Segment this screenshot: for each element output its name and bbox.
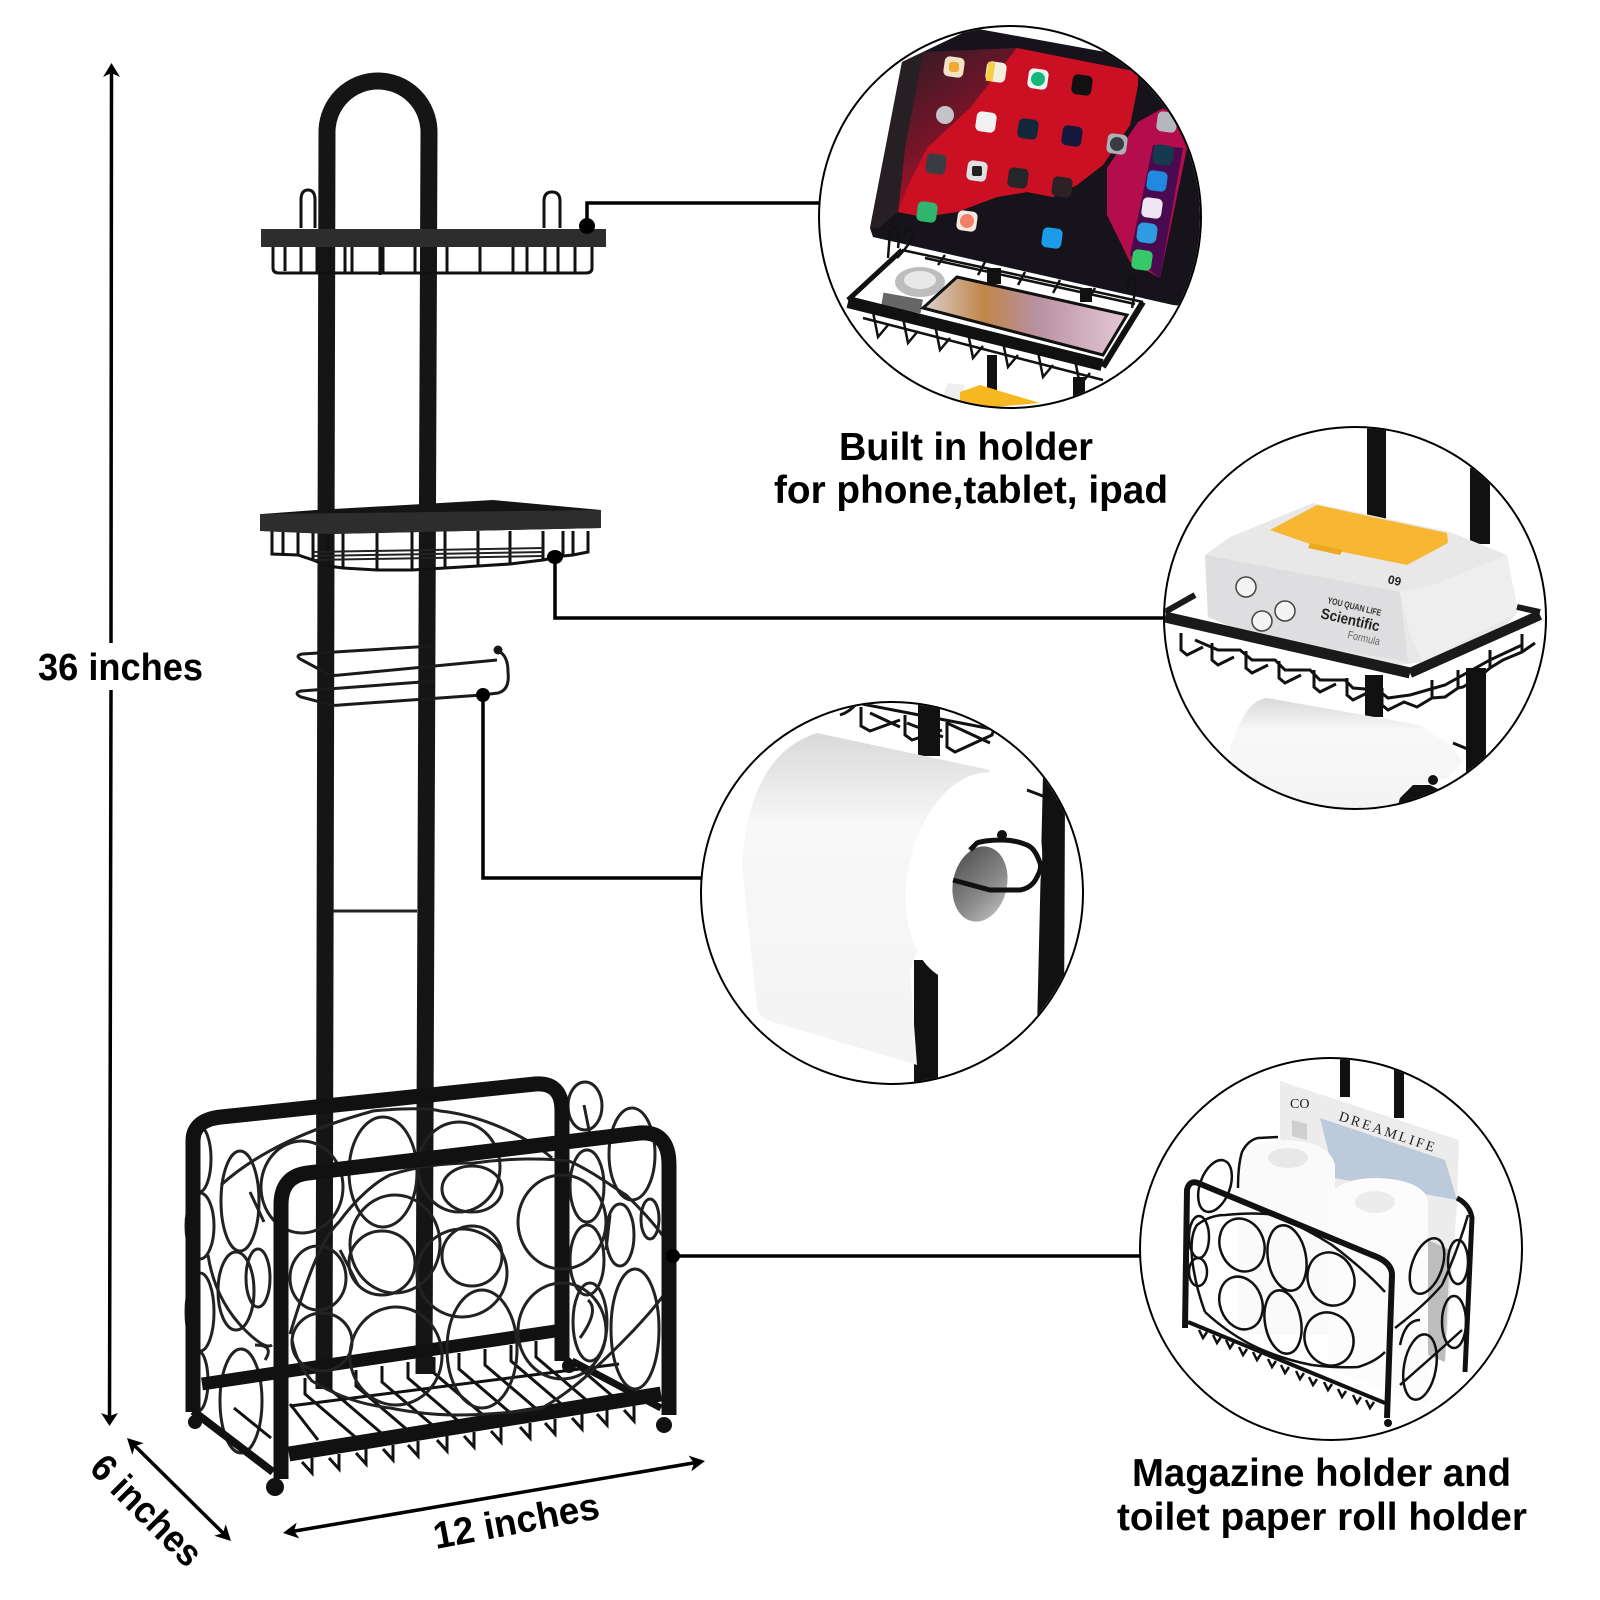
magazine <box>1280 1081 1459 1362</box>
circle outline <box>1164 427 1546 809</box>
app icons <box>916 56 1178 271</box>
wipes pack <box>1205 503 1518 665</box>
circle outline <box>701 702 1083 1084</box>
shelf frame <box>1165 595 1540 673</box>
upper shelf <box>261 190 606 275</box>
caption: magazine holder: toilet paper roll holder <box>1117 1496 1527 1539</box>
holder basket with phone and watch <box>848 228 1143 410</box>
basket poles <box>1340 1055 1404 1118</box>
basket feet <box>188 1359 672 1496</box>
tablet <box>870 28 1207 308</box>
shelf poles <box>1365 420 1490 784</box>
hook <box>953 830 1041 890</box>
panel: magazine basket detail <box>1140 1055 1522 1440</box>
wipes pack: YOU QUAN LIFE <box>1327 595 1382 618</box>
toilet rolls <box>1268 1140 1428 1354</box>
wire basket <box>1181 633 1535 710</box>
callout connector: lower shelf <box>547 550 1164 618</box>
basket floor hooks <box>1188 1322 1385 1408</box>
lower shelf <box>260 500 601 570</box>
caption: built in holder <box>774 426 1168 512</box>
circle outline <box>819 26 1201 408</box>
wipes pack: Scientific <box>1319 605 1381 635</box>
dimension arrow: 12 inches width <box>283 1456 705 1538</box>
panel: wipes shelf detail <box>1164 420 1546 815</box>
label: 6 inches: 6 inches <box>82 1447 210 1575</box>
panel: tablet and phone holder detail <box>819 26 1207 410</box>
basket and poles <box>840 700 1065 1090</box>
magazine basket <box>186 1082 672 1496</box>
panel: toilet roll holder detail <box>701 700 1083 1090</box>
caption: magazine holder: Magazine holder and <box>1132 1452 1511 1495</box>
wipes pack: 60 <box>1386 572 1403 589</box>
basket wire rings <box>1189 1137 1468 1402</box>
magazine: CO <box>1290 1097 1309 1112</box>
caption: magazine holder <box>1117 1452 1527 1539</box>
toilet roll under shelf <box>1230 698 1470 815</box>
basket floor <box>193 1330 661 1473</box>
callout connector: roll holder <box>476 688 701 878</box>
basket front frame <box>281 1133 669 1479</box>
callout connector: basket <box>666 1249 1140 1263</box>
circle outline <box>1140 1058 1522 1440</box>
caption: built in holder: for phone,tablet, ipad <box>774 469 1168 512</box>
product: toilet paper stand <box>186 81 672 1496</box>
basket back frame <box>1457 1198 1472 1372</box>
callout connector: upper shelf <box>579 203 820 234</box>
toilet roll bar <box>297 646 508 705</box>
dimension arrow: 36 inches height <box>101 63 120 1426</box>
label: 12 inches: 12 inches <box>430 1486 603 1558</box>
toilet roll <box>742 733 1061 1065</box>
dimension arrow: 6 inches depth <box>127 1438 231 1541</box>
basket back wire scrolls <box>186 1082 655 1453</box>
label: 36 inches: 36 inches <box>38 647 203 689</box>
basket front wire scrolls <box>290 1159 663 1415</box>
basket back frame <box>193 1084 562 1412</box>
wipes pack: Formula <box>1346 629 1382 649</box>
basket front frame <box>1185 1182 1392 1418</box>
stand uprights and arch <box>324 81 429 1389</box>
magazine: DREAMLIFE <box>1337 1110 1436 1156</box>
caption: built in holder: Built in holder <box>839 426 1093 469</box>
